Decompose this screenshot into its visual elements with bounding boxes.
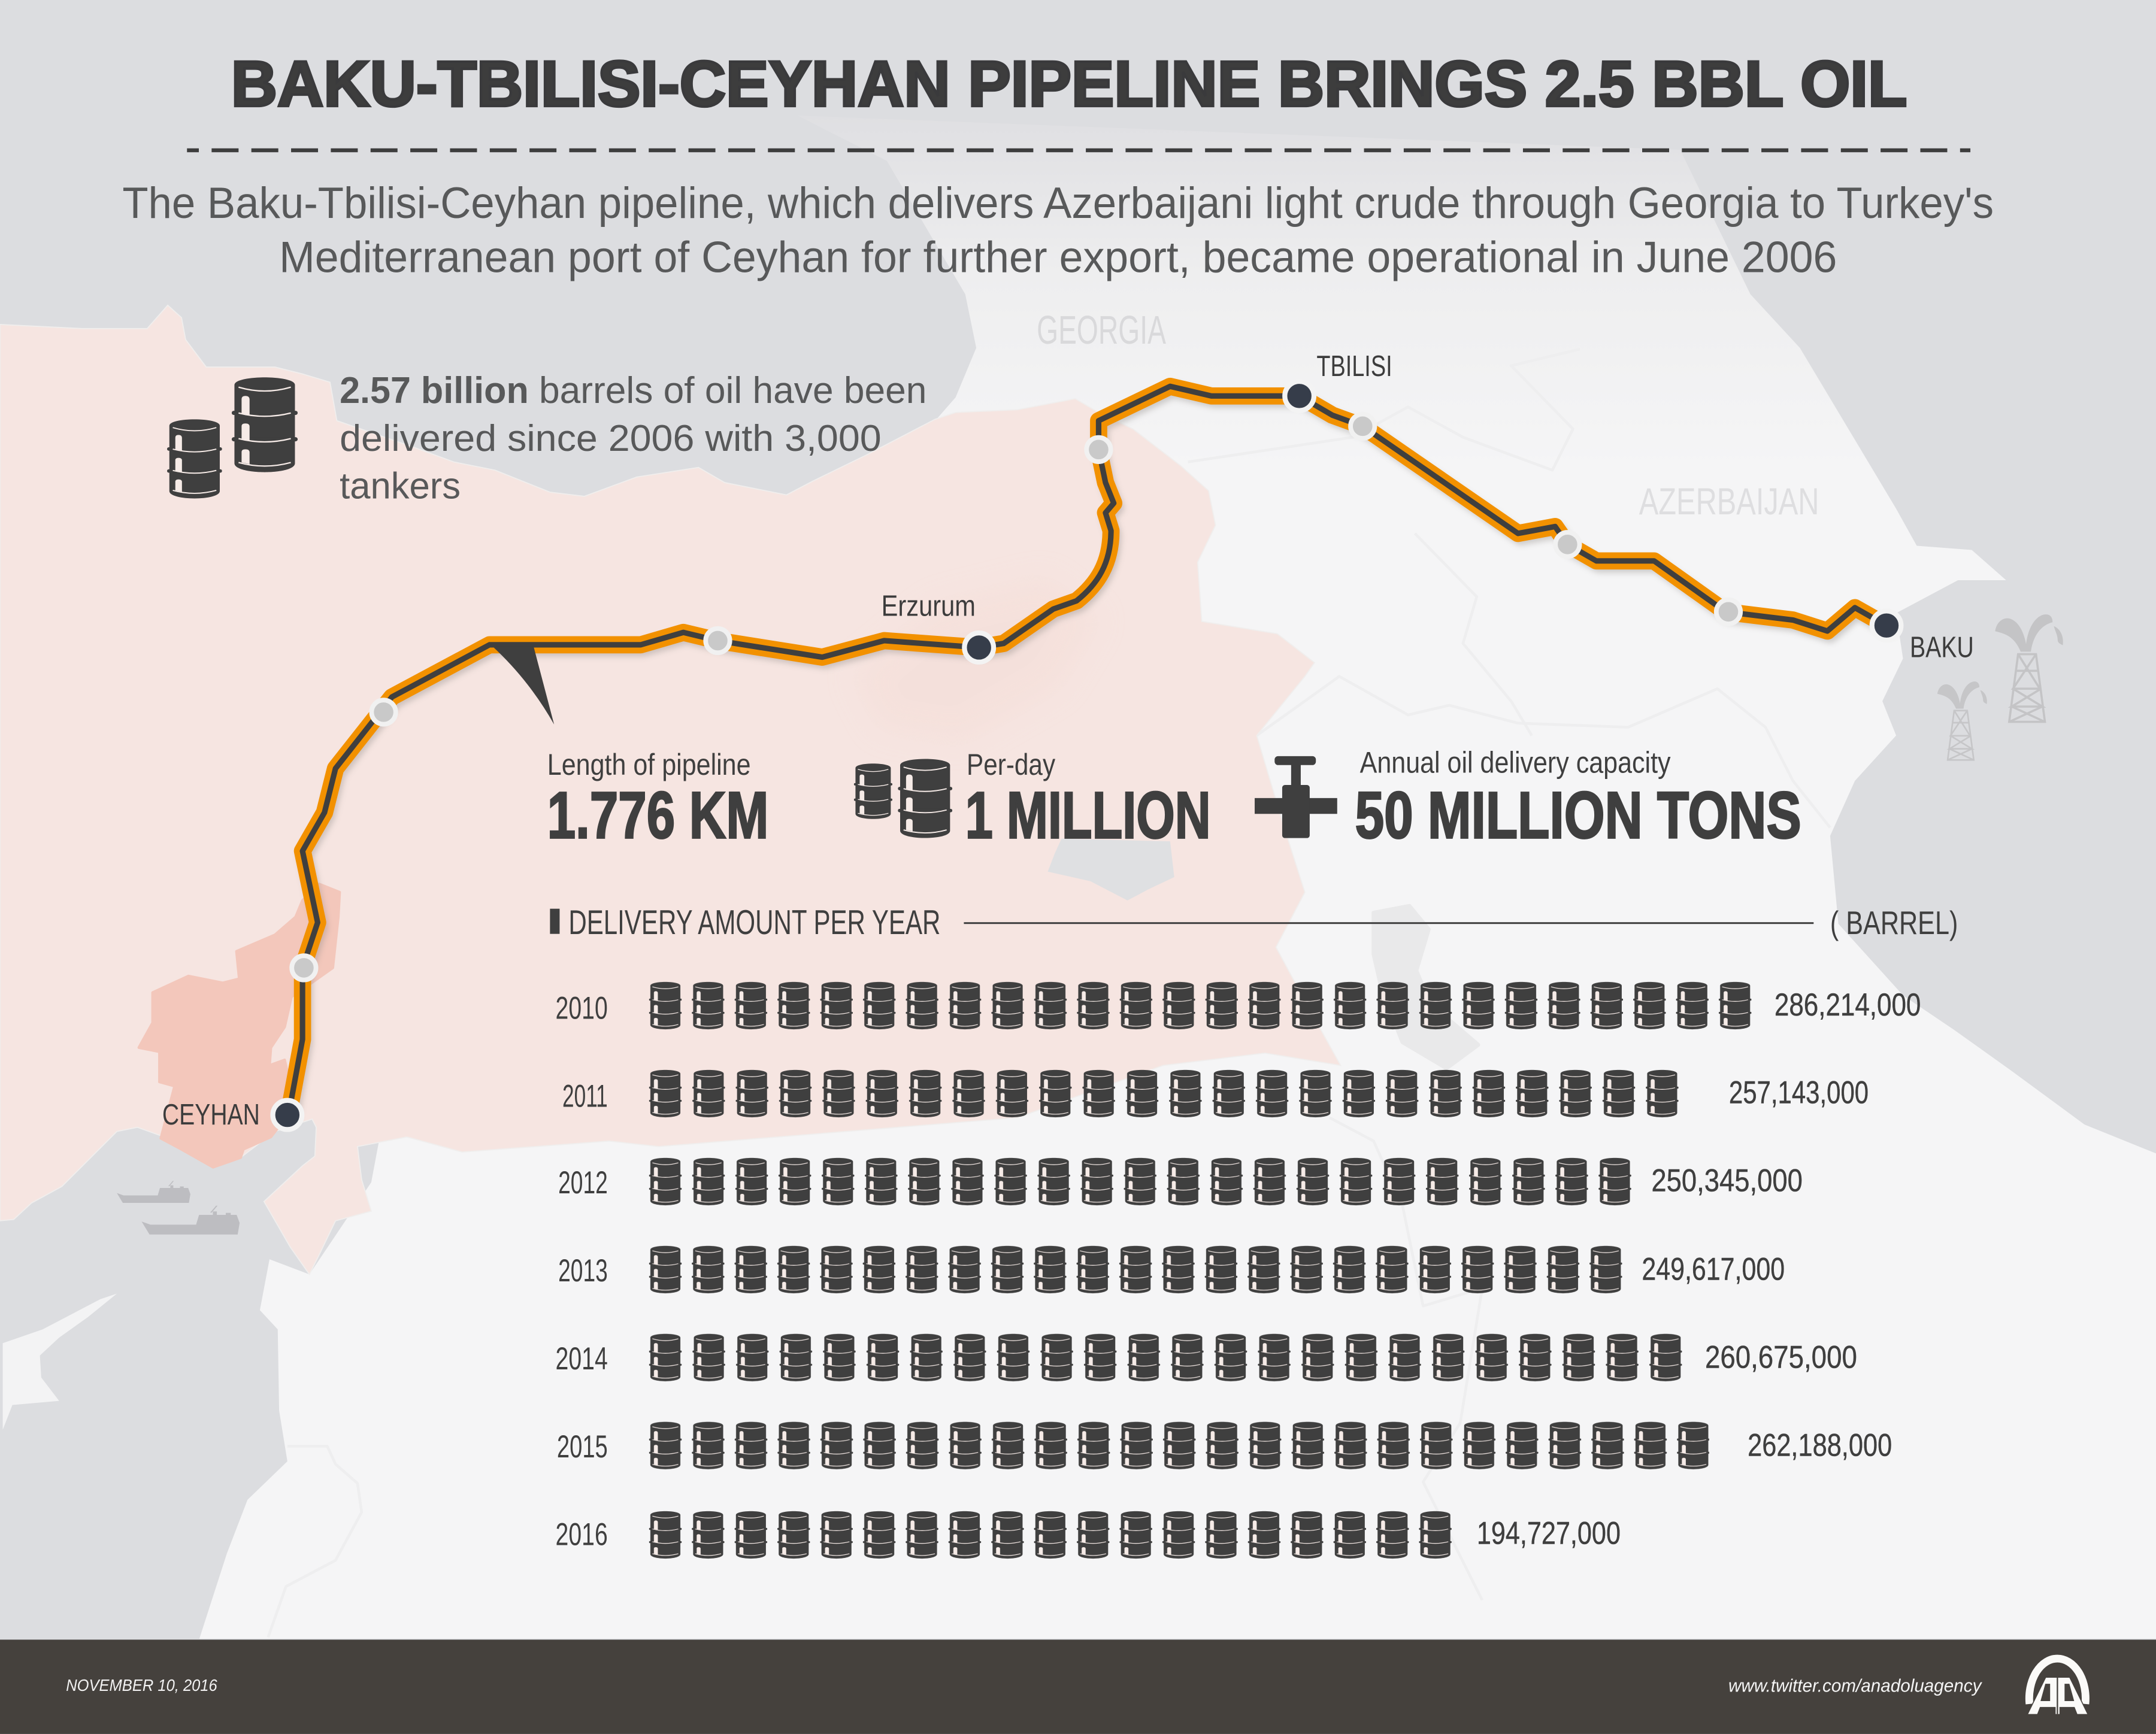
stat: annual capacity bbox=[1355, 745, 1801, 853]
label: Tbilisi: TBILISI bbox=[1316, 350, 1392, 383]
footer date: NOVEMBER 10, 2016 bbox=[66, 1676, 217, 1694]
icon: per-day barrels bbox=[854, 759, 952, 838]
row: 2011: 257,143,000 bbox=[1729, 1075, 1869, 1111]
label: Baku: BAKU bbox=[1910, 631, 1974, 664]
row: 2015 bbox=[557, 1420, 1892, 1471]
chart heading: delivery amount per year: ( BARREL) bbox=[1830, 904, 1958, 941]
subtitle: Mediterranean port of Ceyhan for further export, became operational in June 2006 bbox=[279, 232, 1837, 282]
icon: oil rigs bbox=[1937, 614, 2063, 760]
row: 2013 bbox=[558, 1244, 1785, 1295]
icon: two oil barrels bbox=[167, 377, 298, 498]
row: 2014: 2014 bbox=[556, 1341, 608, 1377]
label: Georgia: GEORGIA bbox=[1037, 308, 1166, 353]
text block: total barrels delivered: tankers bbox=[340, 465, 461, 507]
row: 2012: 2012 bbox=[558, 1165, 608, 1201]
text block: total barrels delivered: delivered since 2006 with 3,000 bbox=[340, 418, 882, 459]
stat: length of pipeline: 1.776 KM bbox=[547, 779, 768, 853]
map: Lake Urmia bbox=[1374, 906, 1478, 1068]
text block: total barrels delivered: 2.57 billion bbox=[340, 370, 529, 411]
stat: annual capacity: Annual oil delivery capacity bbox=[1360, 745, 1671, 779]
icon: ships at sea bbox=[117, 1181, 240, 1235]
label: Azerbaijan: AZERBAIJAN bbox=[1639, 481, 1819, 523]
stat: length of pipeline: Length of pipeline bbox=[547, 747, 751, 781]
map: Lake Van bbox=[1047, 839, 1174, 901]
chart heading: delivery amount per year bbox=[550, 904, 1958, 942]
map: land north, east and south bbox=[199, 116, 2156, 1639]
stat: per-day: Per-day bbox=[967, 747, 1056, 781]
row: 2016: 2016 bbox=[556, 1517, 608, 1553]
row: 2011 bbox=[562, 1068, 1869, 1119]
subtitle: The Baku-Tbilisi-Ceyhan pipeline, which delivers Azerbaijani light crude through Georgia to Turkey's bbox=[122, 178, 1994, 228]
row: 2016: 194,727,000 bbox=[1477, 1515, 1621, 1551]
stat: annual capacity: 50 MILLION TONS bbox=[1355, 779, 1801, 853]
map: faint highland patch bbox=[852, 577, 1100, 742]
pipeline length pointer bbox=[492, 646, 554, 724]
text block: total barrels delivered: barrels of oil have been bbox=[539, 370, 926, 411]
row: 2011: 2011 bbox=[562, 1078, 608, 1114]
stat: per-day: 1 MILLION bbox=[965, 779, 1211, 853]
map: faint country borders bbox=[268, 349, 1830, 1638]
row: 2014: 260,675,000 bbox=[1705, 1340, 1857, 1375]
footer url: www.twitter.com/anadoluagency bbox=[1728, 1675, 1983, 1696]
chart heading: delivery amount per year: DELIVERY AMOUNT PER YEAR bbox=[568, 904, 940, 942]
map: Turkey highlighted bbox=[0, 305, 1341, 1274]
icon: Anadolu Agency logo bbox=[2028, 1659, 2087, 1714]
row: 2010: 286,214,000 bbox=[1775, 987, 1921, 1023]
row: 2010 bbox=[556, 980, 1921, 1031]
row: 2010: 2010 bbox=[556, 990, 608, 1026]
stat: per-day bbox=[965, 747, 1211, 853]
pictogram chart: barrels per year bbox=[556, 980, 1921, 1560]
row: 2012 bbox=[558, 1156, 1803, 1207]
row: 2015: 262,188,000 bbox=[1748, 1427, 1892, 1463]
title: BAKU-TBILISI-CEYHAN PIPELINE BRINGS 2.5 BBL OIL bbox=[231, 47, 1907, 120]
label: Erzurum: Erzurum bbox=[882, 590, 976, 623]
row: 2013: 249,617,000 bbox=[1642, 1252, 1785, 1287]
text block: total barrels delivered bbox=[340, 370, 926, 507]
stat: length of pipeline bbox=[547, 747, 768, 853]
pipeline waypoints bbox=[292, 414, 1740, 980]
row: 2013: 2013 bbox=[558, 1253, 608, 1289]
subtitle bbox=[122, 178, 1994, 282]
map: Adana region highlighted bbox=[139, 884, 340, 1167]
pipeline route bbox=[289, 386, 1889, 1118]
row: 2014 bbox=[556, 1332, 1857, 1383]
map: island of Cyprus bbox=[3, 1294, 117, 1430]
footer bar bbox=[0, 1639, 2156, 1734]
row: 2016 bbox=[556, 1509, 1621, 1560]
label: Ceyhan: CEYHAN bbox=[162, 1098, 260, 1131]
row: 2012: 250,345,000 bbox=[1651, 1163, 1803, 1199]
title divider bbox=[187, 150, 1970, 151]
icon: pipe valve bbox=[1255, 756, 1337, 838]
row: 2015: 2015 bbox=[557, 1429, 608, 1465]
pipeline cities: markers bbox=[273, 381, 1901, 1129]
